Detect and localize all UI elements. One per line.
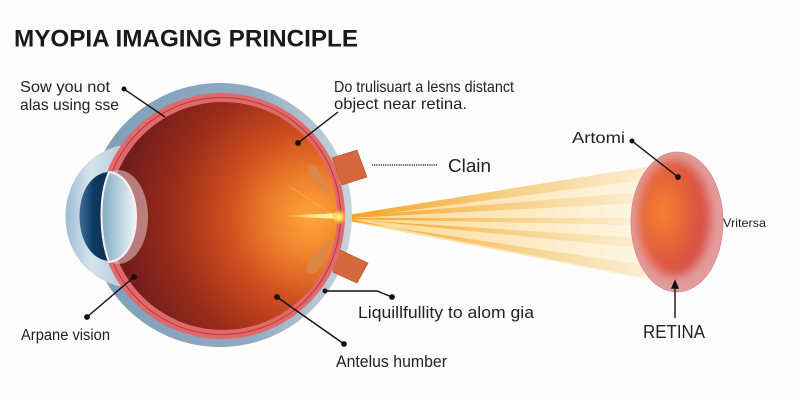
label: top left second line: alas using sse: [20, 97, 119, 114]
label: top centre second line: object near retina.: [334, 96, 467, 113]
optic tabs: [332, 150, 368, 283]
label: top left: Sow you not: [20, 79, 111, 96]
label: RETINA: RETINA: [643, 321, 706, 342]
eye cross-section: [65, 83, 368, 347]
retina: [631, 152, 723, 292]
focal point: [282, 188, 347, 225]
cornea: [65, 146, 150, 286]
sclera: [88, 83, 352, 347]
label: Antelus humber: Antelus humber: [336, 353, 447, 371]
vitreous body: [109, 102, 337, 330]
retinal patches: [308, 164, 330, 195]
label: Liquillfullity: Liquillfullity to alom gia: [358, 303, 535, 322]
label: Vritersa: Vritersa: [723, 216, 766, 230]
leader lines: [85, 87, 680, 346]
light beam: [342, 166, 650, 280]
choroid ring: [99, 93, 345, 339]
label: Artomi: Artomi: [572, 130, 625, 147]
infographic canvas: [16, 30, 766, 367]
iris: [80, 172, 108, 261]
label: Arpane vision: Arpane vision: [21, 327, 110, 344]
title: MYOPIA IMAGING PRINCIPLE: [14, 26, 358, 52]
label: top centre: Do trulisuart a lesns distanct: [334, 79, 514, 96]
label: Clain: Clain: [448, 155, 491, 176]
lens halo: [88, 170, 148, 264]
lens: [102, 172, 136, 262]
